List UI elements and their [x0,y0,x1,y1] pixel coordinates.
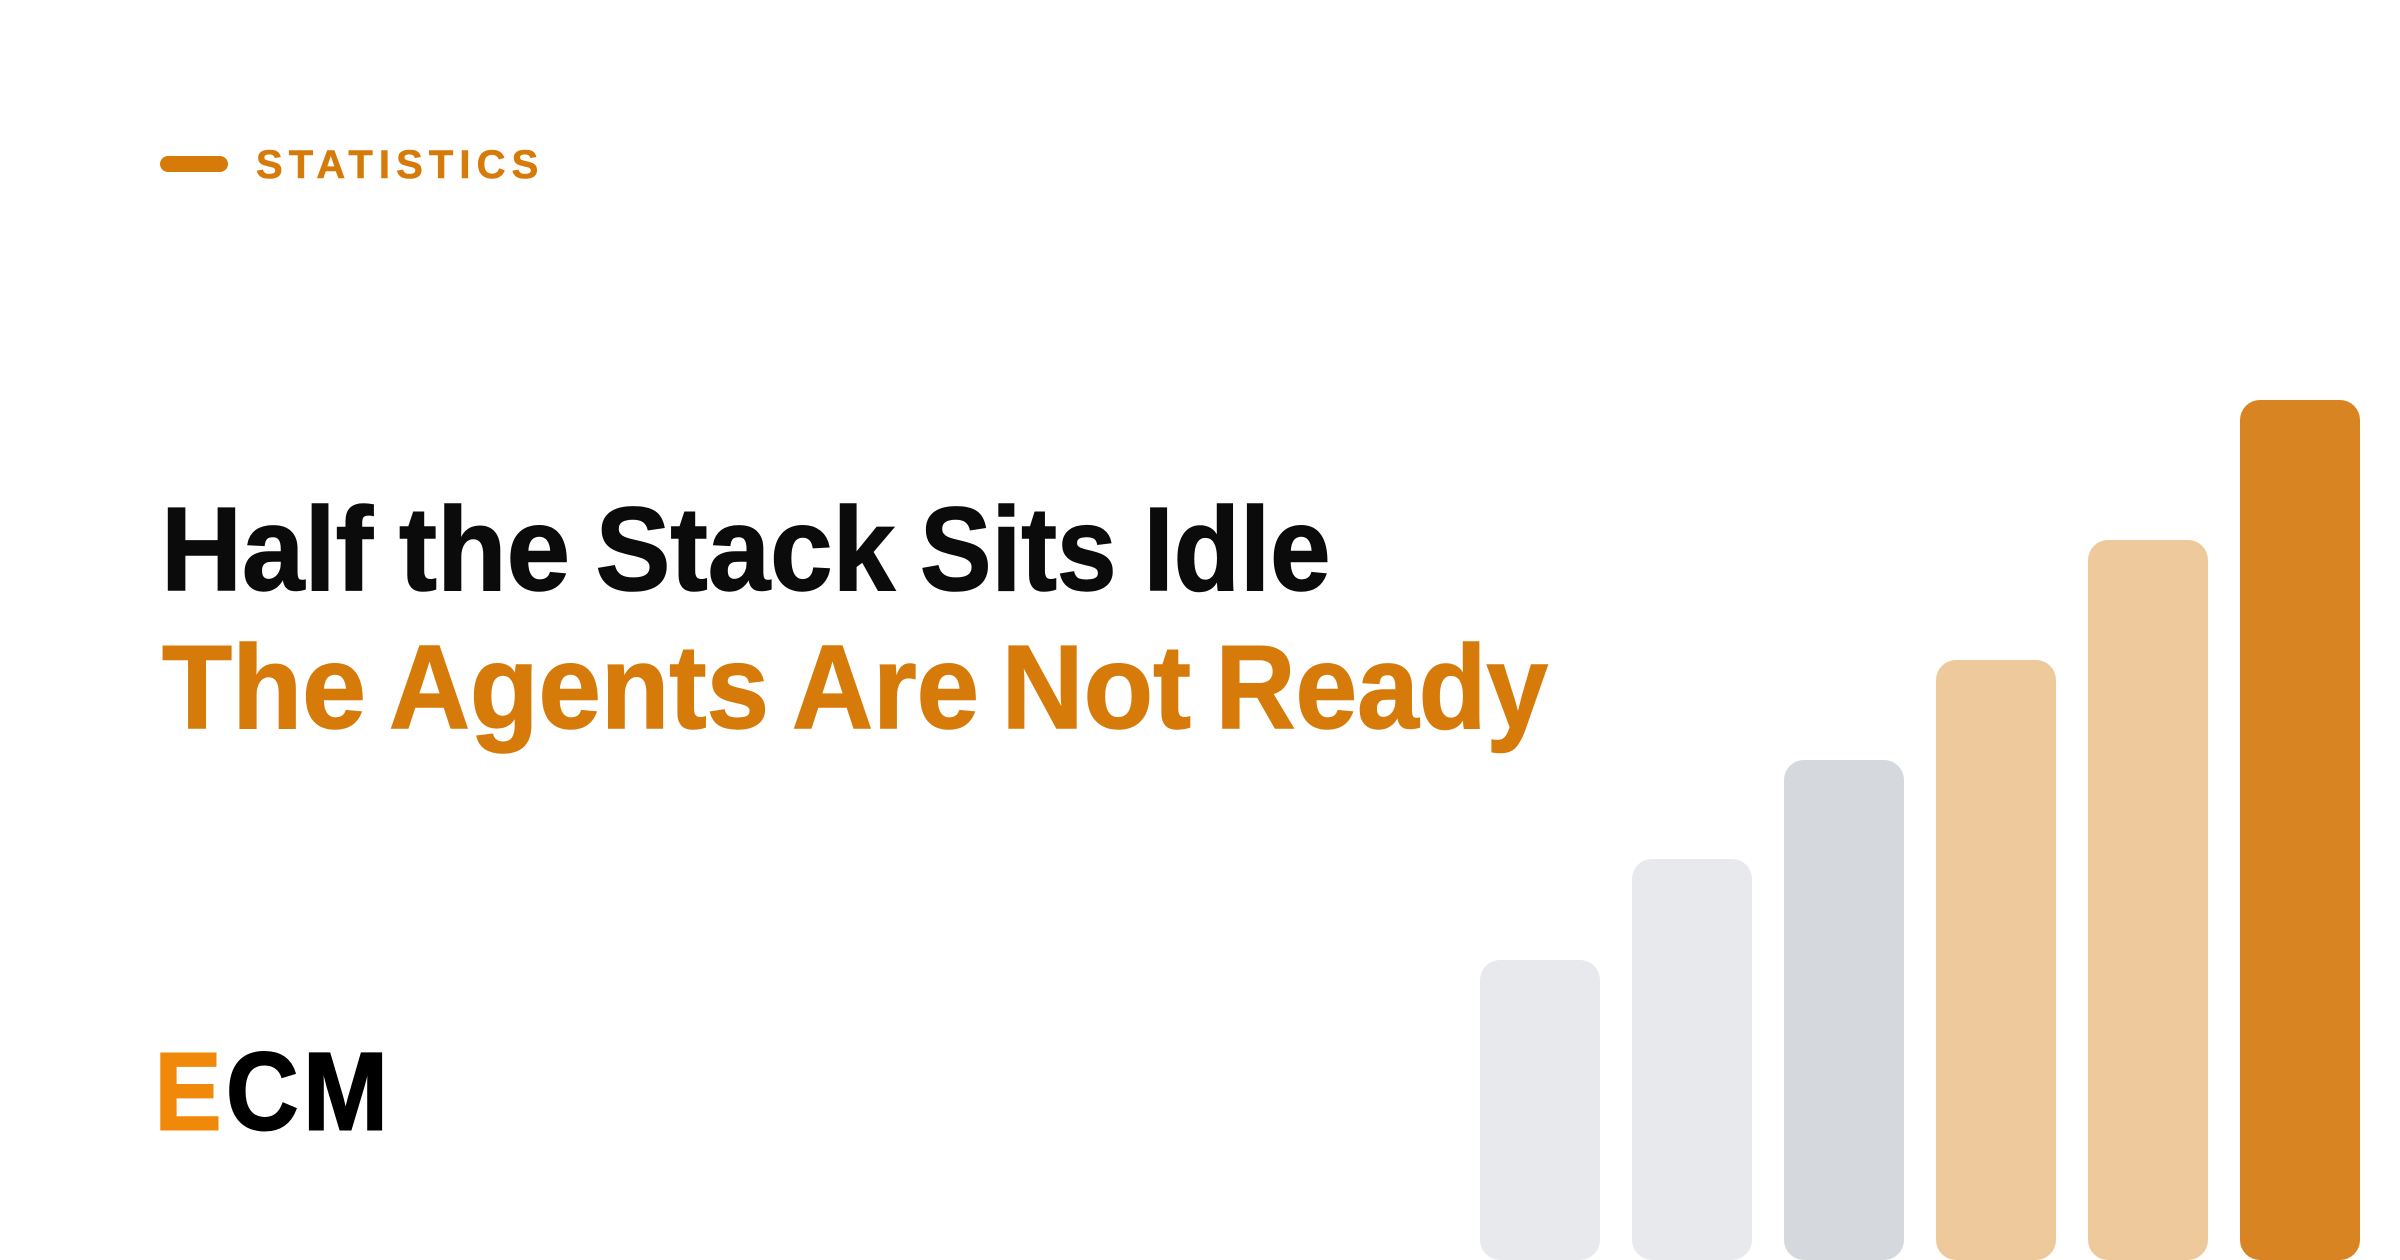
subtitle: Ready [1216,621,1548,754]
eyebrow accent pill [160,156,228,172]
eyebrow label: STATISTICS [256,143,544,187]
eyebrow: statistics [160,143,544,187]
logo: ECM: C [226,1030,298,1154]
subtitle: The [162,621,366,754]
subtitle: Not [1002,621,1191,754]
subtitle: Agents [389,621,769,754]
subtitle: Are [792,621,979,754]
logo: ECM: E [154,1030,222,1154]
title: the [399,483,570,616]
title: Idle [1144,483,1330,616]
bar 3 [1784,760,1904,1260]
bar 2 [1632,859,1752,1260]
bar 5 [2088,540,2208,1260]
title [161,483,1330,616]
subtitle [162,621,1548,754]
logo: ECM [154,1030,388,1154]
bar 4 [1936,660,2056,1260]
bar chart [1480,400,2360,1260]
bar 1 [1480,960,1600,1260]
logo: ECM: M [303,1030,388,1154]
title: Sits [920,483,1116,616]
title: Stack [596,483,896,616]
title: Half [161,483,373,616]
bar 6 [2240,400,2360,1260]
